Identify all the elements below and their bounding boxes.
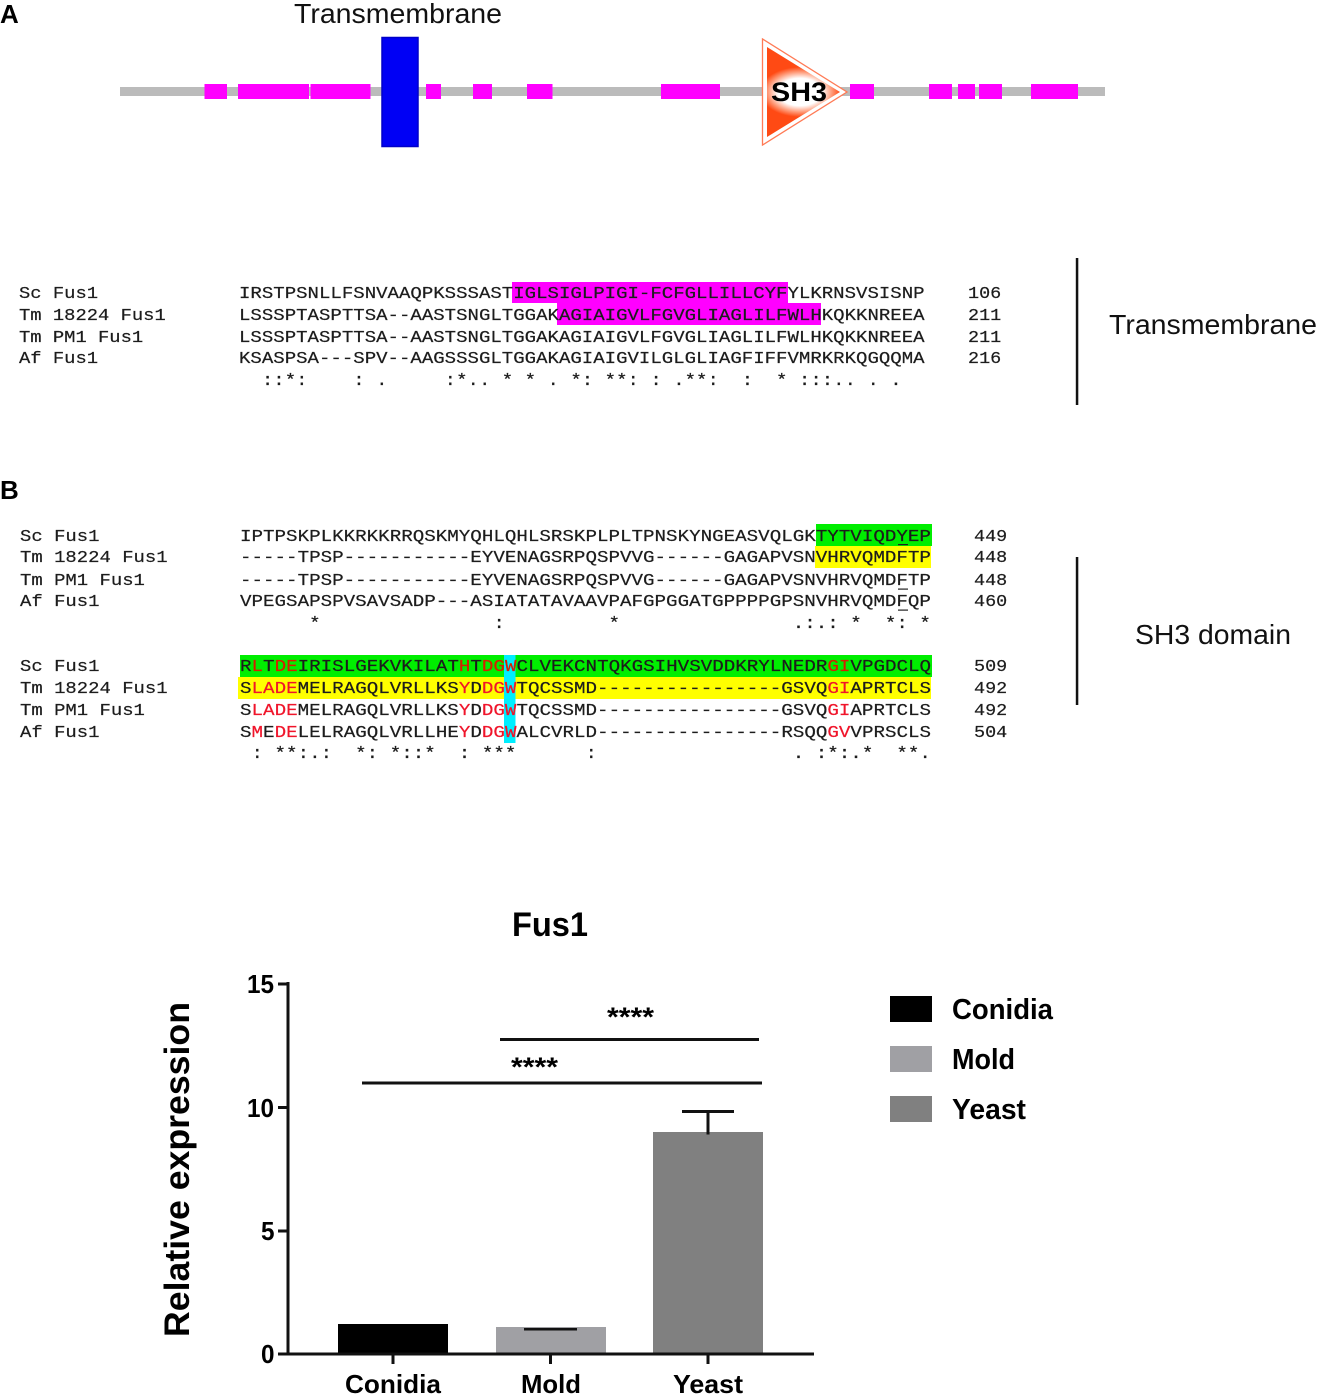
species labels [20,528,168,612]
residue numbers: 509 [974,658,1007,677]
sequences: SLADEMELRAGQLVRLLKSYDDGWTQCSSMD----------------GSVQGIAPRTCLS [240,702,931,721]
residue numbers: 448 [974,549,1007,568]
sequences [239,285,925,391]
sequences: SLADEMELRAGQLVRLLKSYDDGWTQCSSMD----------------GSVQGIAPRTCLS [240,680,931,699]
bracket line: transmembrane [1076,258,1078,405]
species labels: Tm 18224 Fus1 [20,680,168,699]
residue numbers [968,285,1001,369]
legend [890,994,1054,1126]
species labels: Tm PM1 Fus1 [20,702,145,721]
species labels: Sc Fus1 [20,528,99,547]
residue numbers: 211 [968,329,1001,348]
residue numbers: 449 [974,528,1007,547]
species labels: Sc Fus1 [19,285,98,304]
alignment: SH3 domain block 2 [20,655,1007,764]
alignment: SH3 domain block 1 [20,524,1007,634]
significance: Conidia vs Yeast: **** [511,1052,559,1082]
legend: Mold: Mold [952,1044,1015,1076]
highlight: Sc transmembrane [512,282,788,303]
sequences: LSSSPTASPTTSA--AASTSNGLTGGAKAGIAIGVLFGVGLIAGLILFWLHKQKKNREEA [239,307,925,326]
sequences: : **:.: *: *::* : *** : . :*:.* **. [240,745,931,764]
x tick labels [345,1369,743,1395]
significance: Mold vs Yeast: **** [607,1002,655,1032]
species labels [19,285,166,369]
species labels: Af Fus1 [20,593,99,612]
sequences [240,528,931,634]
bar: Conidia [338,1324,448,1354]
error bar: Mold [524,1328,577,1330]
highlight: Tm 18224 transmembrane [557,303,821,325]
residue numbers: 106 [968,285,1001,304]
legend: Yeast: Yeast [952,1094,1026,1126]
significance: Mold vs Yeast [500,1002,759,1041]
residue numbers: 504 [974,724,1007,743]
bracket line: SH3 domain [1076,557,1078,705]
sequences: SMEDELELRAGQLVRLLHEYDDGWALCVRLD----------------RSQQGVVPRSCLS [240,724,931,743]
species labels: Tm 18224 Fus1 [19,307,166,326]
sequences: IPTPSKPLKKRKKRRQSKMYQHLQHLSRSKPLPLTPNSKYNGEASVQLGKTYTVIQDYEP [240,528,931,547]
chart title: Fus1 [512,906,588,944]
highlight: conserved tryptophan [504,655,516,743]
residue numbers: 216 [968,350,1001,369]
highlight: Sc SH3 start [816,524,932,546]
panel label B: B [0,475,19,505]
legend: Mold [890,1044,1015,1076]
protein domain diagram [120,38,1105,146]
axes [278,982,814,1364]
legend: Yeast [890,1094,1026,1126]
bar: Yeast [653,1132,763,1354]
residue numbers [974,528,1007,612]
y tick labels: 15 [247,971,274,999]
species labels [20,658,168,743]
species labels: Af Fus1 [20,724,99,743]
protein backbone [120,87,1105,96]
legend: Conidia: Conidia [952,994,1054,1026]
sequences [240,658,931,764]
sequences: IRSTPSNLLFSNVAAQPKSSSASTIGLSIGLPIGI-FCFGLLILLCYFYLKRNSVSISNP [239,285,925,304]
sequences: ::*: : . :*.. * * . *: **: : .**: : * :::.. . . [239,372,902,391]
y axis title: Relative expression [158,1002,197,1337]
label: Transmembrane: Transmembrane [1109,309,1317,340]
bar chart: relative expression [158,971,814,1395]
species labels: Af Fus1 [19,350,98,369]
SH3 triangle [762,39,847,145]
highlight: Sc SH3 [240,655,932,677]
species labels: Tm PM1 Fus1 [20,572,145,591]
transmembrane block [382,38,418,146]
residue numbers [974,658,1007,743]
y tick labels: 0 [261,1341,274,1369]
alignment: transmembrane region [19,282,1001,391]
low complexity segments [204,84,1078,99]
species labels: Sc Fus1 [20,658,99,677]
highlight: Tm 18224 SH3 start [815,546,931,568]
error bar: Yeast [682,1110,734,1134]
residue numbers: 211 [968,307,1001,326]
highlight: Tm 18224 SH3 [238,677,931,699]
SH3 triangle: SH3 [771,77,827,107]
residue numbers: 460 [974,593,1007,612]
y tick labels: 5 [261,1218,274,1246]
sequences: * : * .:.: * *: * [240,615,931,634]
residue numbers: 492 [974,702,1007,721]
bar: Mold [496,1327,606,1354]
legend: Conidia [890,994,1054,1026]
sequences: VPEGSAPSPVSAVSADP---ASIATATAVAAVPAFGPGGATGPPPPGPSNVHRVQMDFQP [240,593,931,612]
sequences: RLTDEIRISLGEKVKILATHTDGWCLVEKCNTQKGSIHVSVDDKRYLNEDRGIVPGDCLQ [240,658,931,677]
sequences: -----TPSP-----------EYVENAGSRPQSPVVG------GAGAPVSNVHRVQMDFTP [240,549,931,568]
sequences: KSASPSA---SPV--AAGSSSGLTGGAKAGIAIGVILGLGLIAGFIFFVMRKRKQGQQMA [239,350,925,369]
residue numbers: 448 [974,572,1007,591]
residue numbers: 492 [974,680,1007,699]
sequences: -----TPSP-----------EYVENAGSRPQSPVVG------GAGAPVSNVHRVQMDFTP [240,572,931,591]
y tick labels [247,971,274,1369]
species labels: Tm 18224 Fus1 [20,549,168,568]
significance: Conidia vs Yeast [362,1052,762,1084]
y tick labels: 10 [247,1095,274,1123]
species labels: Tm PM1 Fus1 [19,329,143,348]
underlined residues [898,544,908,611]
label: SH3 domain: SH3 domain [1135,619,1291,650]
sequences: LSSSPTASPTTSA--AASTSNGLTGGAKAGIAIGVLFGVGLIAGLILFWLHKQKKNREEA [239,329,925,348]
